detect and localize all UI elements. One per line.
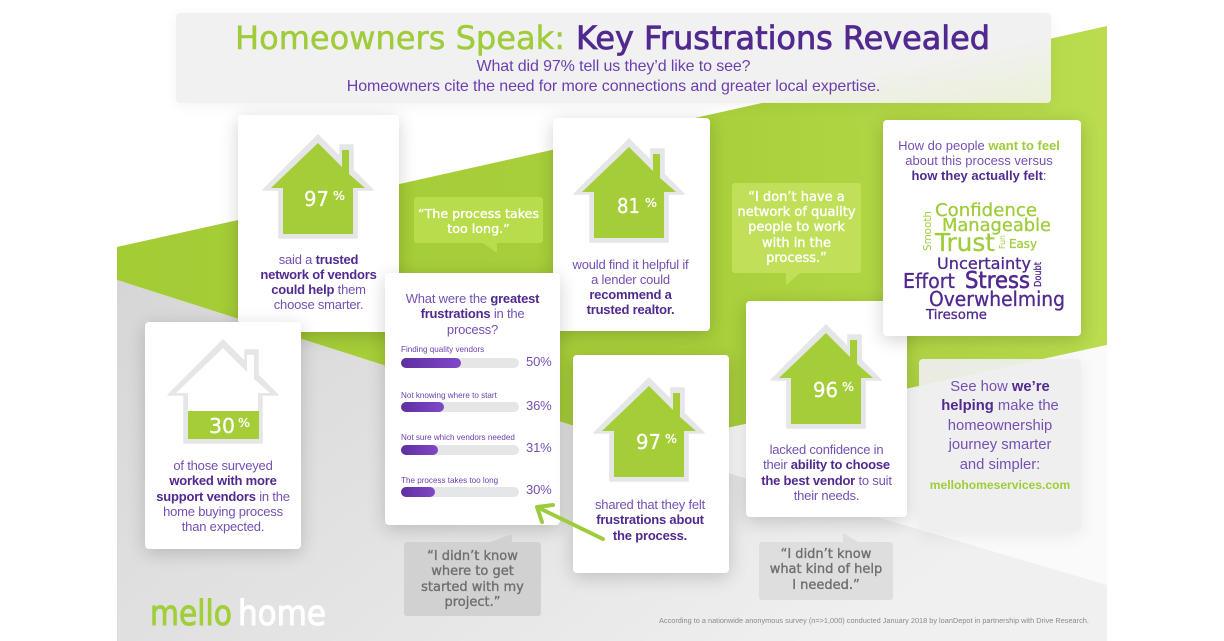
bar: process takes too long: 30% (526, 482, 552, 496)
callout text: helping make the (941, 398, 1059, 414)
icon: house 81% (573, 138, 685, 243)
panel: word cloud card (883, 120, 1081, 336)
icon: house 97% frustrations (593, 378, 705, 482)
bar: not sure which vendors needed: 31% (526, 440, 552, 454)
icon: house 97% frustrations: % (665, 431, 677, 446)
icon: house 81%: 81 (617, 194, 640, 218)
word cloud: Smooth (921, 211, 934, 251)
logo: mello home: mello (150, 594, 232, 634)
word cloud: Trust (934, 228, 995, 257)
quote: process takes too long (414, 197, 543, 243)
card: 81% recommend realtor (553, 118, 710, 331)
text: 97% frustrations description (595, 497, 706, 543)
quote: didn't know where to start: where to get (431, 564, 514, 579)
quote: didn't know where to start: project.” (444, 595, 500, 610)
quote: no network of quality people: process.” (766, 251, 827, 266)
callout text: See how we’re (950, 379, 1050, 395)
logo: mello home: home (238, 594, 326, 634)
quote: no network of quality people: “I don’t have a (748, 190, 845, 204)
bar: finding quality vendors (401, 344, 552, 369)
heading: how people want to feel: how they actually felt: (911, 168, 1047, 183)
text: 97% description: said a trusted (279, 252, 358, 266)
heading: how people want to feel: about this process versus (905, 153, 1053, 168)
callout text (941, 379, 1059, 473)
text: 97% frustrations description: shared that they felt (595, 497, 705, 512)
speech tail (786, 273, 800, 285)
speech tail (490, 534, 512, 542)
text: 97% frustrations description: frustrations about (596, 512, 704, 527)
text: 81% description: trusted realtor. (587, 302, 674, 317)
text: 30% description (156, 458, 290, 534)
title (235, 19, 990, 57)
subtitle: What did 97% tell us they’d like to see? (476, 58, 750, 75)
bar: process takes too long (401, 476, 552, 497)
icon: house 97%: 97 (304, 187, 329, 211)
bar: not knowing where to start (401, 390, 552, 412)
text: 97% description: choose smarter. (274, 297, 363, 312)
callout text: and simpler: (960, 457, 1040, 473)
subtitle (347, 58, 880, 95)
speech tail (843, 534, 858, 542)
text: 96% description: the best vendor to suit (761, 473, 892, 488)
text: 30% description: of those surveyed (173, 458, 273, 473)
word cloud: Effort (903, 269, 955, 293)
quote: process takes too long: too long.” (447, 221, 510, 236)
bar: finding quality vendors: 50% (526, 354, 552, 369)
word cloud (903, 200, 1065, 323)
bar: not knowing where to start: Not knowing where to start (401, 390, 497, 400)
icon: house 97% (262, 134, 374, 239)
word cloud: Confidence (935, 200, 1037, 221)
text: 81% description (572, 256, 689, 317)
subtitle: Homeowners cite the need for more connections and greater local expertise. (347, 78, 880, 95)
quote: didn't know what help: “I didn’t know (781, 547, 871, 562)
callout text: homeownership (948, 418, 1052, 434)
quote: no network of quality people: network of quality (737, 205, 856, 220)
text: 97% frustrations description: the process. (613, 528, 687, 543)
text: 81% description: would find it helpful if (573, 256, 688, 272)
panel: greatest frustrations bar chart (385, 273, 560, 525)
text: 97% description: network of vendors (260, 267, 377, 282)
icon: house 30%: % (238, 415, 250, 430)
word cloud: Stress (965, 268, 1030, 294)
quote: no network of quality people: people to work (748, 220, 845, 235)
logo: mello home (150, 594, 326, 634)
icon: house 97%: % (333, 188, 345, 203)
title: Key Frustrations Revealed (576, 19, 990, 57)
heading: greatest frustrations: What were the greatest (406, 291, 539, 306)
callout link: mellohomeservices.com (930, 478, 1070, 492)
text: 97% description: could help them (271, 282, 366, 297)
quote: didn't know what help: what kind of help (770, 562, 882, 577)
icon: house 96%: 96 (813, 378, 838, 402)
quote: no network of quality people (732, 183, 861, 273)
text: 96% description: their ability to choose (763, 457, 890, 472)
word cloud: Overwhelming (929, 287, 1065, 311)
icon: house 96%: % (842, 379, 854, 394)
text: 30% description: home buying process (163, 504, 283, 519)
callout: see how we're helping (919, 359, 1081, 531)
word cloud: Tiresome (925, 308, 987, 323)
card: 30% more support vendors (145, 322, 301, 549)
icon: house 30% (167, 340, 279, 444)
quote: no network of quality people: with in the (762, 236, 831, 251)
word cloud: Fun (998, 235, 1007, 249)
text: 30% description: worked with more (169, 473, 277, 488)
text: 81% description: recommend a (589, 287, 672, 302)
text: 96% description: their needs. (794, 488, 859, 503)
quote: didn't know what help: I needed.” (792, 578, 860, 593)
quote: process takes too long: “The process takes (418, 206, 539, 220)
heading: greatest frustrations: frustrations in the (421, 306, 524, 321)
heading: how people want to feel: How do people want to feel (898, 138, 1060, 153)
word cloud: Manageable (942, 215, 1051, 236)
bar: not knowing where to start: 36% (526, 398, 552, 412)
text: 97% description (260, 252, 377, 312)
word cloud: Uncertainty (937, 254, 1031, 273)
title: Homeowners Speak: (235, 19, 565, 57)
card: 97% trusted network (238, 115, 399, 332)
heading: how people want to feel (898, 138, 1060, 183)
header panel (176, 13, 1051, 103)
footnote: According to a nationwide anonymous survey (n=>1,000) conducted January 2018 by loanDepot in partnership with Drive Research. (659, 616, 1089, 625)
icon: house 97% frustrations: 97 (636, 430, 661, 454)
quote: didn't know where to start: started with my (421, 580, 524, 595)
card: 96% lacked confidence (746, 301, 907, 517)
text: 81% description: a lender could (591, 272, 670, 287)
icon: house 96% (770, 324, 882, 429)
word cloud: Easy (1009, 237, 1037, 251)
bar: not sure which vendors needed: Not sure which vendors needed (401, 432, 515, 442)
text: 30% description: support vendors in the (156, 489, 290, 504)
card: 97% frustrations (573, 355, 729, 573)
word cloud: Doubt (1033, 262, 1044, 287)
callout text: journey smarter (949, 437, 1051, 453)
bar: finding quality vendors: Finding quality vendors (401, 344, 484, 354)
icon: house 81%: % (645, 195, 657, 210)
text: 30% description: than expected. (182, 519, 264, 534)
text: 96% description (761, 442, 892, 503)
text: 96% description: lacked confidence in (770, 442, 883, 457)
speech tail (484, 243, 497, 253)
icon: house 30%: 30 (209, 414, 235, 438)
bar: process takes too long: The process takes too long (401, 476, 498, 484)
quote: didn't know what help (759, 542, 893, 600)
heading: greatest frustrations: process? (447, 322, 498, 337)
quote: didn't know where to start (404, 542, 541, 616)
quote: didn't know where to start: “I didn’t know (427, 549, 518, 564)
heading: greatest frustrations (406, 291, 540, 337)
bar: not sure which vendors needed (401, 432, 552, 455)
